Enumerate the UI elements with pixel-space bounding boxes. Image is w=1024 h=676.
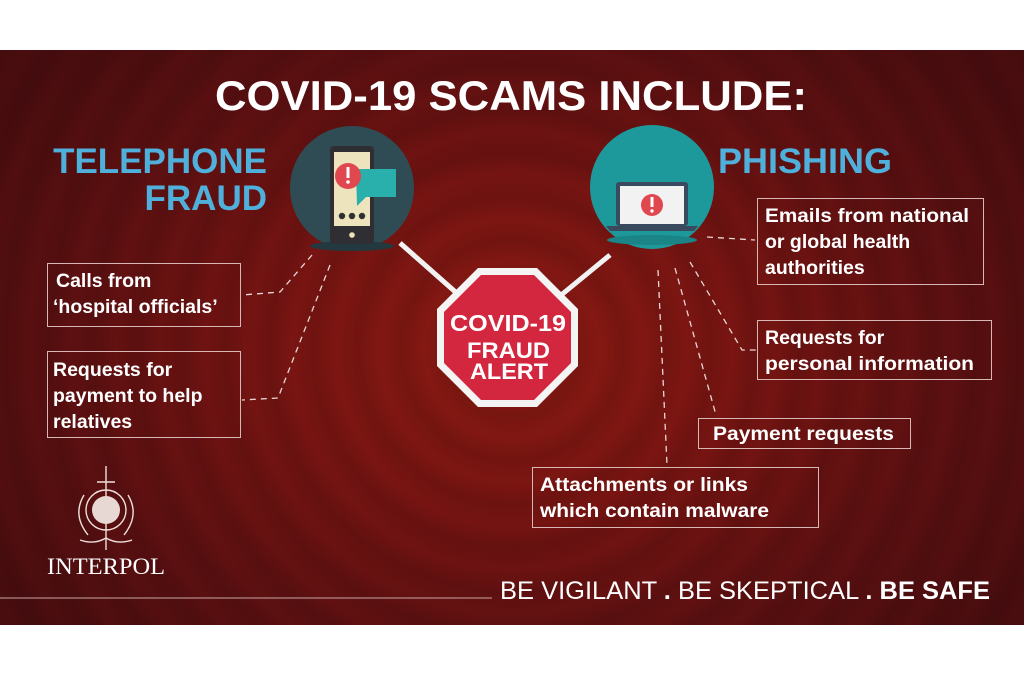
box: attachments: Attachments or links: [540, 474, 748, 496]
logo: interpol: INTERPOL: [47, 554, 165, 579]
box: personal information: personal information: [765, 353, 974, 375]
box: emails: authorities: [765, 257, 865, 279]
box: payment requests: [698, 418, 910, 448]
heading: telephone fraud: TELEPHONE: [53, 142, 267, 181]
box: calls from hospital officials: Calls from: [56, 270, 151, 292]
footer line: [0, 597, 492, 599]
stop sign: ALERT: [470, 359, 549, 384]
stop sign: FRAUD: [467, 338, 550, 363]
box: personal information: Requests for: [765, 327, 885, 349]
box: emails: or global health: [765, 231, 910, 253]
box: emails: Emails from national: [765, 205, 969, 227]
icon: laptop circle: [590, 125, 714, 249]
logo: interpol: [47, 466, 165, 579]
box: payment requests: Payment requests: [713, 423, 894, 445]
slogan: BE VIGILANT . BE SKEPTICAL . BE SAFE: [500, 577, 990, 605]
box: calls from hospital officials: ‘hospital officials’: [53, 296, 218, 318]
heading: telephone fraud: [53, 142, 267, 218]
box: requests for payment: payment to help: [53, 385, 203, 407]
box: calls from hospital officials: [48, 264, 240, 326]
icon: phone circle: [290, 126, 414, 251]
box: requests for payment: relatives: [53, 411, 132, 433]
box: emails: [758, 198, 984, 284]
box: attachments: which contain malware: [539, 500, 769, 522]
title: COVID-19 SCAMS INCLUDE:: [215, 72, 807, 119]
stop sign: [437, 268, 578, 407]
stop sign: COVID-19: [450, 310, 566, 336]
heading: telephone fraud: FRAUD: [145, 179, 267, 218]
connector lines: [400, 243, 610, 296]
heading: phishing: PHISHING: [718, 142, 892, 181]
box: personal information: [758, 320, 992, 380]
box: attachments: [532, 468, 818, 528]
dashed leader lines: [242, 237, 757, 465]
box: requests for payment: [48, 352, 240, 438]
box: requests for payment: Requests for: [53, 359, 173, 381]
